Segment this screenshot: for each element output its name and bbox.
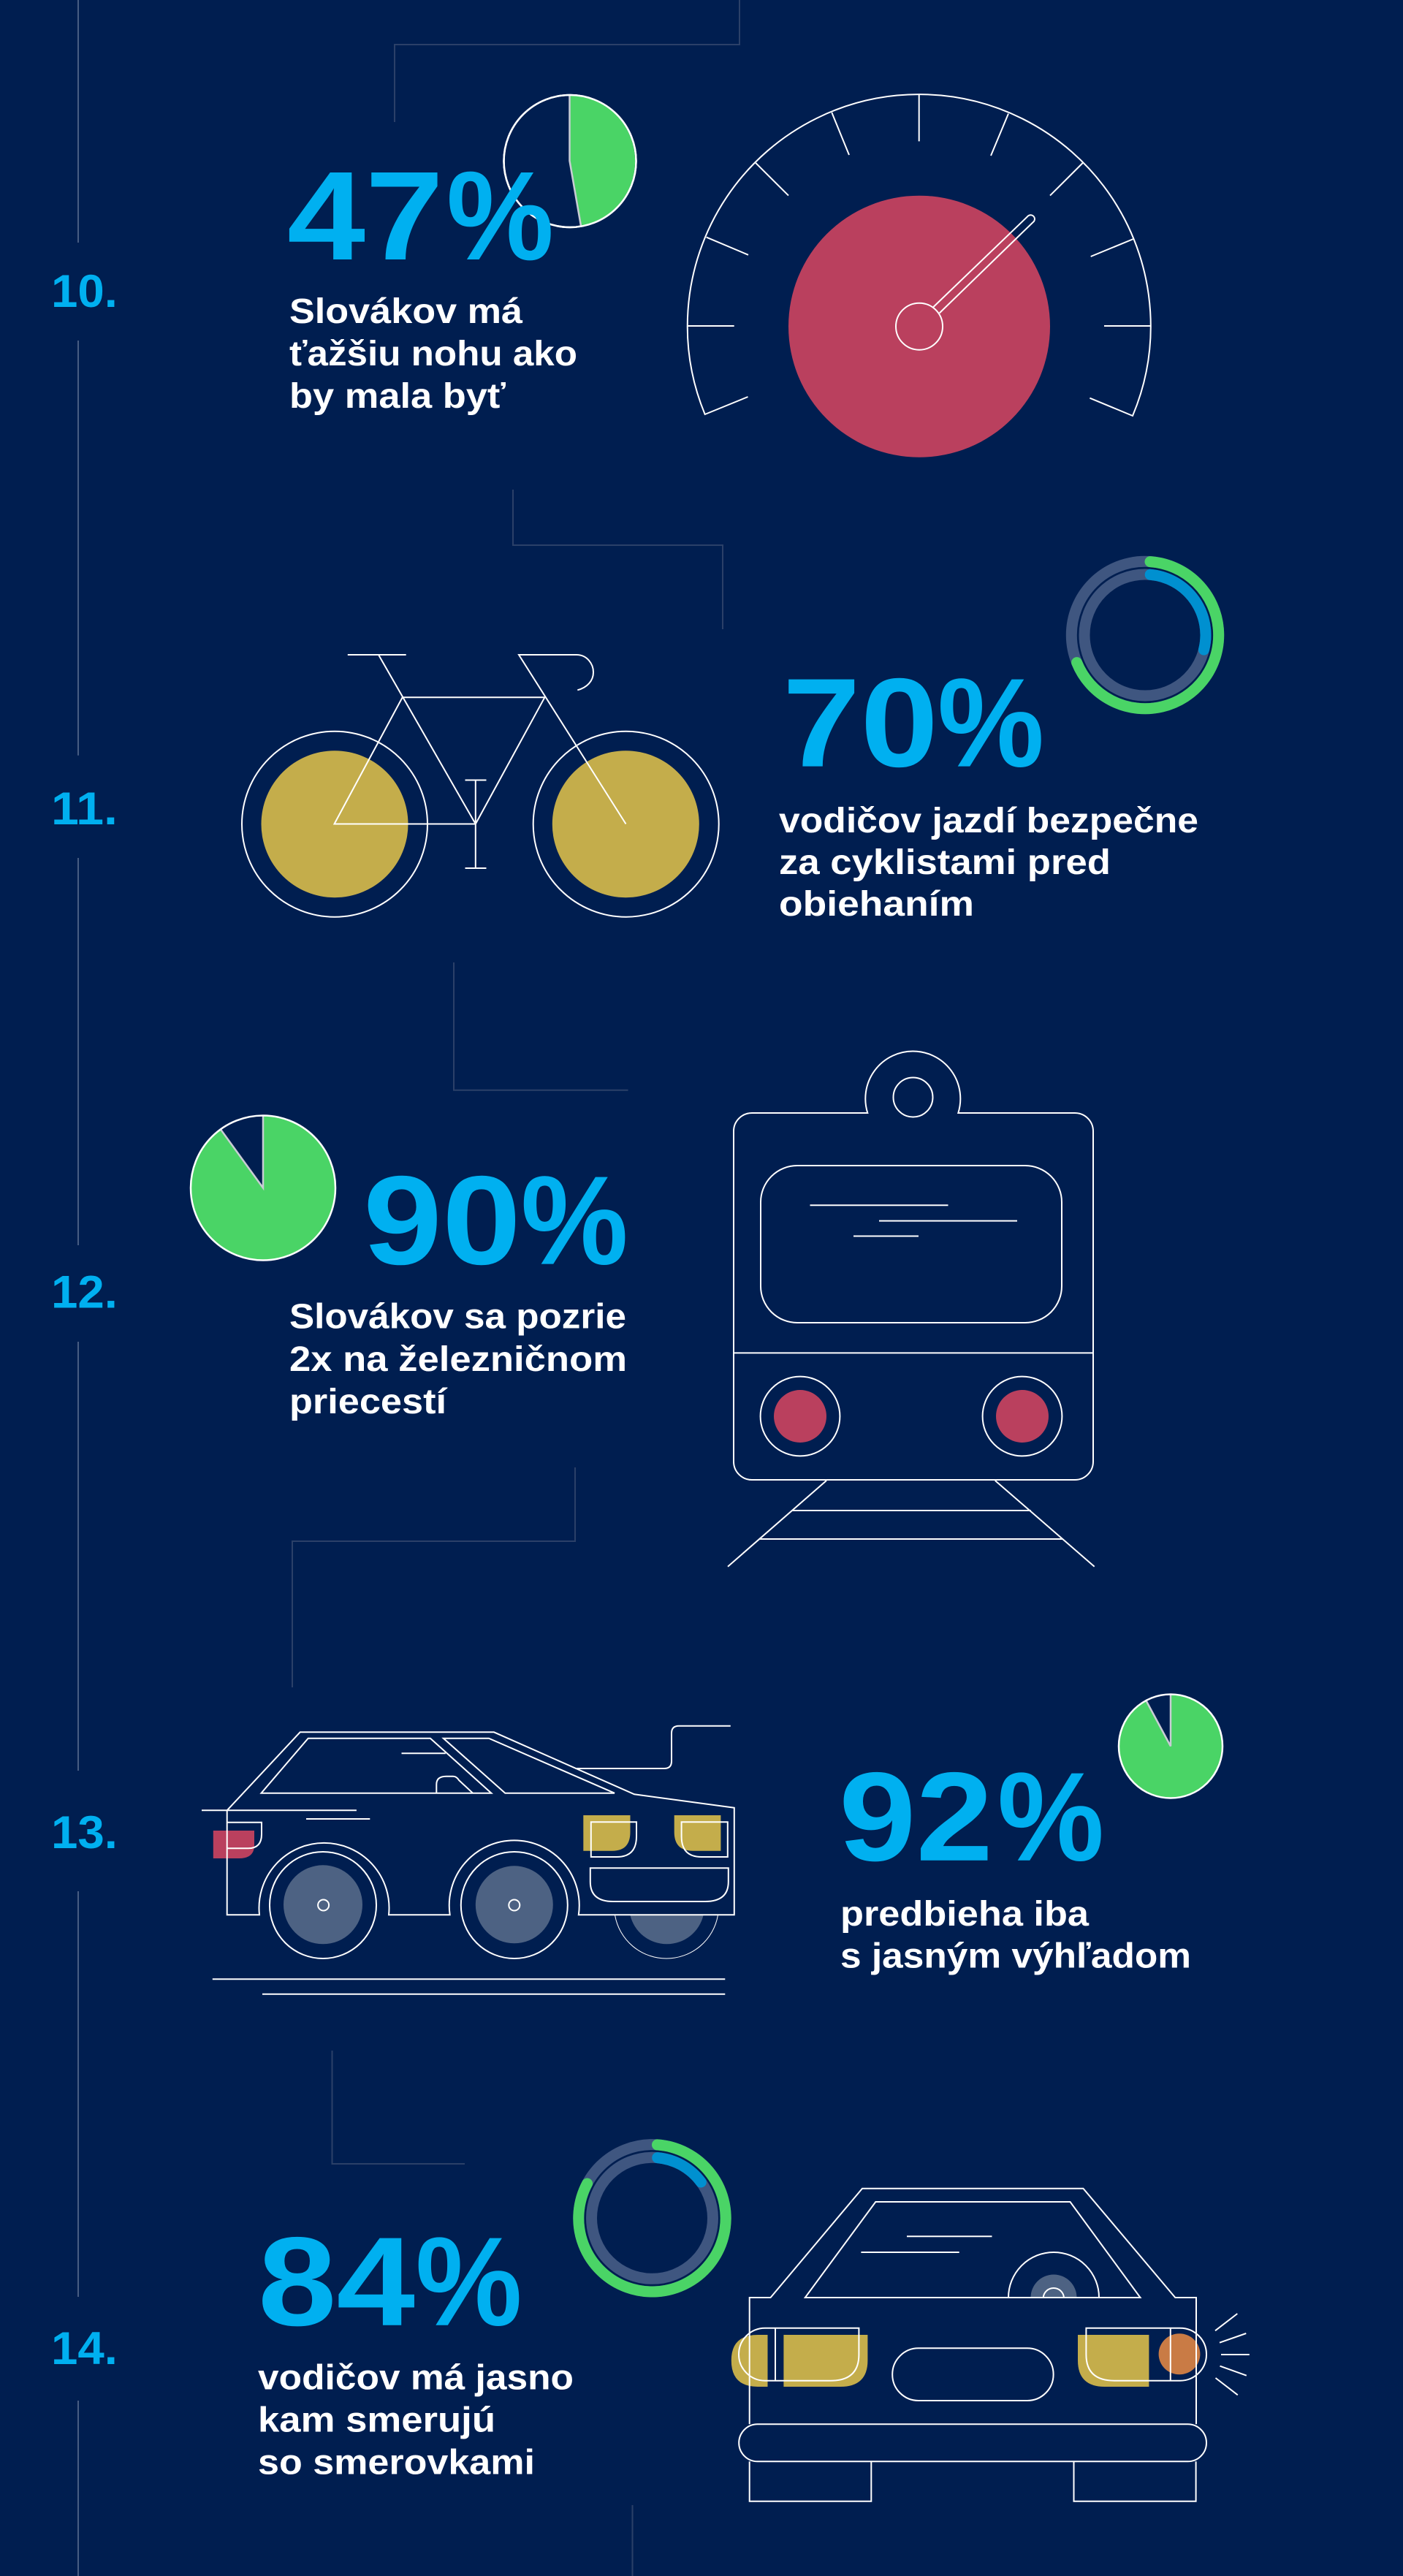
description 12: priecestí — [289, 1383, 448, 1421]
stat 47% — [287, 145, 554, 286]
icon: car side view — [202, 1726, 734, 1994]
section 14 — [51, 2145, 1250, 2501]
stat 92% — [839, 1746, 1104, 1888]
stat 84%: 84 — [258, 2211, 415, 2352]
description 13 — [840, 1895, 1191, 1976]
stat 84%: % — [416, 2211, 522, 2352]
description 10: Slovákov má — [289, 292, 522, 331]
stat 92%: 92 — [839, 1746, 993, 1888]
section 11 — [51, 561, 1219, 924]
icon: bicycle — [242, 655, 719, 917]
stat 84% — [258, 2211, 522, 2352]
description 14: kam smerujú — [258, 2401, 495, 2439]
description 10: by mala byť — [289, 377, 506, 416]
timeline line — [77, 0, 79, 2576]
number 13: 13. — [51, 1807, 118, 1858]
stat 70%: % — [938, 652, 1044, 794]
description 12: 2x na železničnom — [289, 1340, 627, 1379]
number 11: 11. — [51, 783, 118, 835]
description 14: so smerovkami — [258, 2444, 535, 2482]
icon: train — [728, 1051, 1095, 1567]
description 11: za cyklistami pred — [779, 843, 1111, 882]
pie chart 90% — [191, 1115, 335, 1260]
description 11: vodičov jazdí bezpečne — [779, 802, 1198, 840]
donut chart 84% — [579, 2145, 726, 2292]
stat 47%: % — [446, 145, 554, 286]
description 10 — [289, 292, 577, 416]
section 12 — [51, 1051, 1095, 1567]
description 11 — [779, 802, 1198, 924]
stat 70% — [783, 652, 1044, 794]
description 13: s jasným výhľadom — [840, 1937, 1191, 1976]
donut chart 70% — [1071, 561, 1219, 709]
description 11: obiehaním — [779, 885, 974, 924]
section 10 — [51, 94, 1151, 457]
description 12: Slovákov sa pozrie — [289, 1298, 626, 1336]
icon: speedometer — [688, 94, 1151, 457]
stat 47%: 47 — [287, 145, 444, 286]
number 14: 14. — [51, 2323, 118, 2374]
pie chart 92% — [1119, 1694, 1223, 1798]
stat 90%: 90 — [363, 1150, 521, 1291]
stat 90%: % — [521, 1150, 628, 1291]
number 10: 10. — [51, 266, 118, 317]
description 10: ťažšiu nohu ako — [289, 335, 577, 373]
stat 70%: 70 — [783, 652, 938, 794]
description 14 — [258, 2358, 574, 2482]
number 12: 12. — [51, 1267, 118, 1318]
pie chart 47% — [504, 95, 636, 227]
icon: car rear view with turn signal — [731, 2189, 1250, 2501]
connector lines — [292, 0, 739, 2576]
stat 92%: % — [997, 1746, 1104, 1888]
stat 90% — [363, 1150, 628, 1291]
description 13: predbieha iba — [840, 1895, 1089, 1934]
section 13 — [51, 1694, 1223, 1994]
description 12 — [289, 1298, 627, 1421]
description 14: vodičov má jasno — [258, 2358, 574, 2397]
